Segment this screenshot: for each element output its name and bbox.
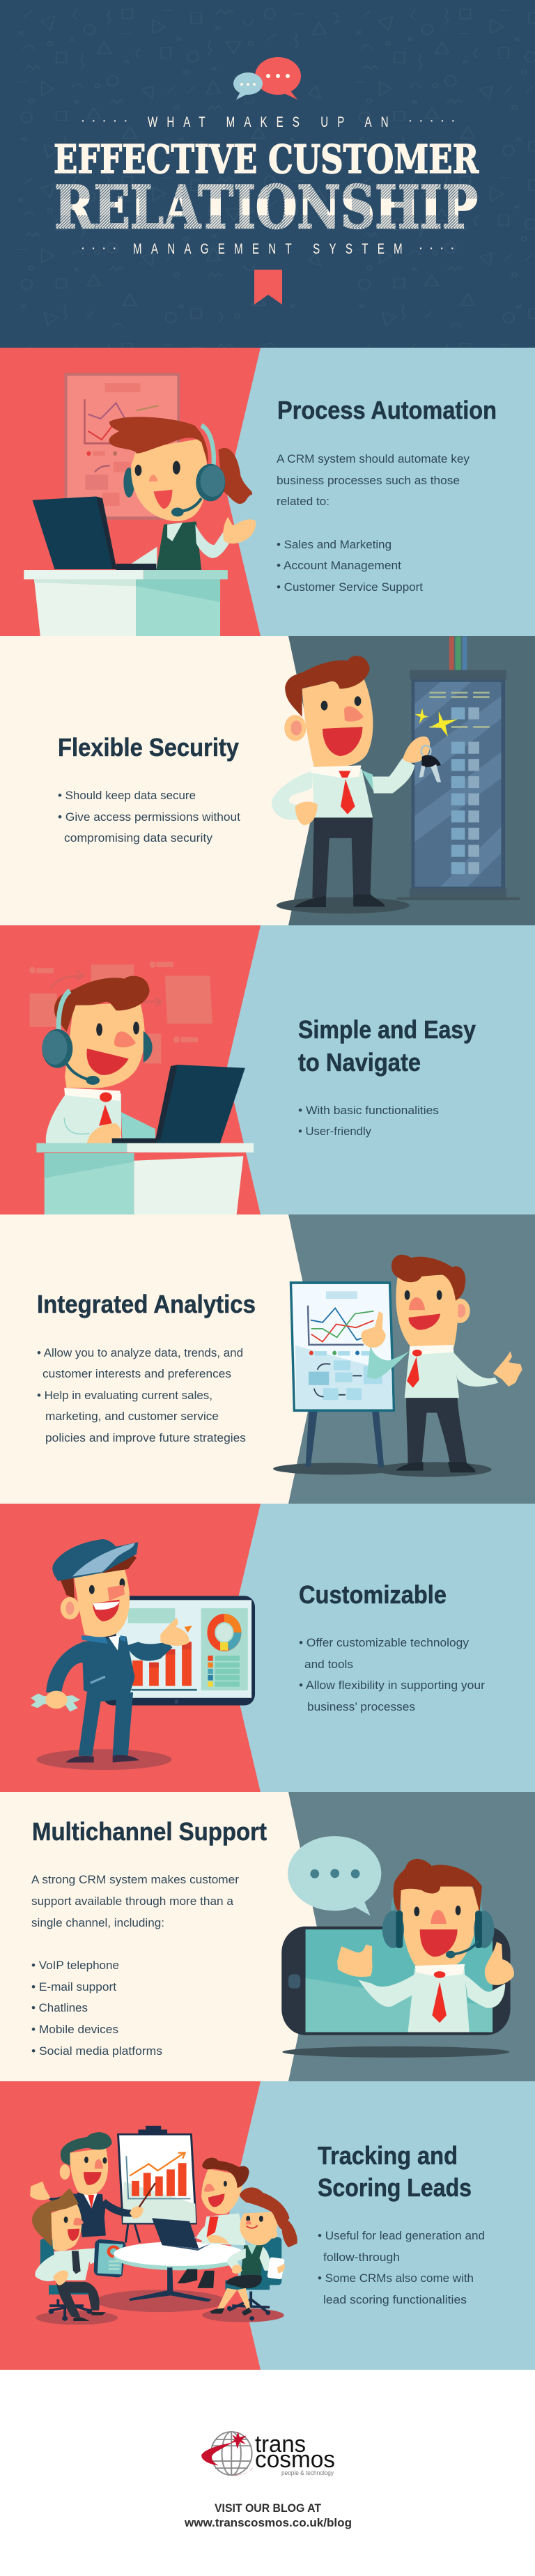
text block: [298, 1104, 439, 1138]
text block: • Give access permissions without: [58, 810, 240, 824]
heading: Tracking and: [318, 2141, 458, 2170]
illustration: man on phone screen with speech bubble: [281, 1836, 514, 2058]
heading: Multichannel Support: [32, 1817, 267, 1846]
text block: support available through more than a: [31, 1895, 234, 1908]
text block: • Chatlines: [31, 2001, 88, 2014]
text block: • With basic functionalities: [298, 1104, 439, 1117]
heading: Scoring Leads: [318, 2173, 472, 2202]
dots left upper: ·····: [82, 115, 127, 126]
heading: Integrated Analytics: [37, 1290, 256, 1318]
heading: Process Automation: [277, 396, 497, 424]
text block: • VoIP telephone: [31, 1959, 119, 1972]
panel: simple and easy to navigate: [0, 925, 535, 1214]
text block: • Customer Service Support: [277, 580, 423, 594]
text block: • E-mail support: [31, 1980, 116, 1993]
text block: [31, 1873, 239, 2058]
text block: marketing, and customer service: [45, 1410, 219, 1423]
panel: multichannel support: [0, 1792, 535, 2081]
text block: business processes such as those: [277, 474, 460, 487]
panel: process automation: [0, 348, 535, 636]
text block: [58, 789, 240, 844]
text block: [37, 1346, 246, 1444]
text block: • User-friendly: [298, 1125, 371, 1138]
heading: to Navigate: [298, 1048, 421, 1077]
text block: A CRM system should automate key: [277, 452, 470, 465]
illustration: team meeting around table: [30, 2126, 297, 2324]
text block: business’ processes: [307, 1700, 415, 1713]
text block: customer interests and preferences: [42, 1367, 231, 1380]
text block: • Help in evaluating current sales,: [37, 1389, 212, 1402]
text block: and tools: [304, 1658, 353, 1671]
logo wordmark: trans: trans: [255, 2431, 306, 2458]
panel: integrated analytics: [0, 1214, 535, 1504]
text block: [277, 452, 470, 594]
panel: header: [0, 0, 535, 348]
text block: [299, 1636, 485, 1713]
heading: what makes up an: WHAT MAKES UP AN: [148, 113, 389, 130]
text block: • Sales and Marketing: [277, 538, 391, 551]
dots left lower: ····: [82, 242, 116, 254]
logo: trans cosmos: [201, 2432, 253, 2476]
text block: • Some CRMs also come with: [318, 2272, 474, 2285]
panel: tracking and scoring leads: [0, 2081, 535, 2370]
text block: follow-through: [323, 2251, 400, 2264]
logo tagline: people & technology: [281, 2469, 334, 2476]
illustration: man with keys and server rack: [272, 636, 520, 913]
call to action: [184, 2501, 352, 2529]
panel: customizable: [0, 1504, 535, 1792]
dots right upper: ·····: [409, 115, 455, 126]
text block: single channel, including:: [31, 1916, 164, 1929]
heading: [298, 1015, 476, 1077]
heading: Flexible Security: [58, 733, 239, 762]
illustration: man with headset at laptop: [29, 961, 254, 1214]
icon: speech bubbles: [233, 57, 301, 100]
text block: • Account Management: [277, 559, 401, 572]
icon: bookmark ribbon: [254, 270, 282, 304]
heading: Simple and Easy: [298, 1015, 476, 1044]
text block: • Allow you to analyze data, trends, and: [37, 1346, 243, 1359]
footer: [184, 2431, 352, 2529]
illustration: mechanic with dashboard tablet: [31, 1539, 255, 1770]
text block: related to:: [277, 495, 329, 508]
heading: [318, 2141, 472, 2202]
text block: • Social media platforms: [31, 2044, 162, 2058]
panel: flexible security: [0, 636, 535, 925]
call to action: www.transcosmos.co.uk/blog: [184, 2516, 352, 2529]
text block: policies and improve future strategies: [45, 1431, 246, 1444]
illustration: man presenting at flip chart: [273, 1255, 522, 1477]
logo wordmark: cosmos: cosmos: [255, 2446, 335, 2473]
call to action: VISIT OUR BLOG AT: [215, 2501, 322, 2515]
text block: [318, 2229, 485, 2306]
text block: • Should keep data secure: [58, 789, 196, 802]
text block: compromising data security: [64, 831, 213, 844]
text block: • Offer customizable technology: [299, 1636, 470, 1649]
text block: • Allow flexibility in supporting your: [299, 1679, 485, 1692]
text block: A strong CRM system makes customer: [31, 1873, 239, 1886]
text block: • Mobile devices: [31, 2023, 118, 2036]
dots right lower: ····: [419, 242, 454, 254]
illustration: woman with headset at laptop: [24, 374, 256, 636]
heading: Customizable: [299, 1580, 447, 1609]
text block: lead scoring functionalities: [323, 2293, 467, 2306]
heading: management system: MANAGEMENT SYSTEM: [133, 240, 403, 257]
text block: • Useful for lead generation and: [318, 2229, 485, 2242]
